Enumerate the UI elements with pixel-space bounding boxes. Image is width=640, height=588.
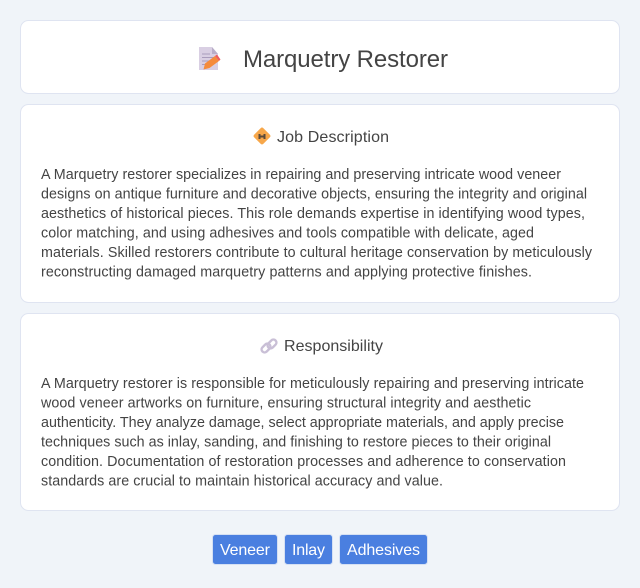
text block: job description: aesthetics of historical pieces. This role demands expertise in identifying wood types, — [41, 206, 585, 222]
panel: title — [20, 20, 620, 94]
text block: responsibility — [40, 376, 584, 490]
icon: chain link — [260, 338, 278, 354]
heading: responsibility: Responsibility — [284, 338, 383, 355]
tag: Adhesives — [340, 534, 428, 564]
text block: responsibility: standards are crucial to maintain historical accuracy and value. — [41, 474, 443, 490]
text block: responsibility: wood veneer artworks on furniture, ensuring structural integrity and aesthetic — [40, 396, 531, 412]
text block: job description — [41, 167, 593, 280]
text block: job description: materials. Skilled restorers contribute to cultural heritage conservation by meticulously — [41, 245, 593, 261]
icon: orange diamond — [253, 127, 271, 145]
text block: job description: color matching, and using adhesives and tools compatible with delicate, aged — [41, 226, 534, 242]
text block: job description: A Marquetry restorer specializes in repairing and preserving intricate wood veneer — [41, 167, 561, 183]
text block: job description: designs on antique furniture and decorative objects, ensuring the integrity and original — [41, 186, 587, 202]
heading: job description: Job Description — [277, 129, 389, 146]
tag: Veneer: Veneer — [220, 542, 271, 559]
tag: Veneer — [212, 534, 278, 564]
text block: responsibility: condition. Documentation of restoration processes and adherence to conservation — [41, 454, 566, 470]
tag: Adhesives: Adhesives — [347, 542, 420, 559]
tag: Inlay — [284, 534, 332, 564]
panel: responsibility — [20, 314, 620, 510]
text block: responsibility: techniques such as inlay, sanding, and finishing to restore pieces to their original — [41, 434, 551, 450]
text block: job description: reconstructing damaged marquetry patterns and applying protective finishes. — [41, 264, 532, 280]
title text: Marquetry Restorer — [243, 46, 448, 73]
text block: responsibility: authenticity. They analyze damage, select appropriate materials, and apply precise — [41, 415, 564, 431]
tag: Inlay: Inlay — [292, 542, 325, 559]
icon: document with pencil — [199, 47, 220, 70]
text block: responsibility: A Marquetry restorer is responsible for meticulously repairing and preserving intricate — [41, 376, 584, 392]
panel: job description — [20, 104, 620, 302]
